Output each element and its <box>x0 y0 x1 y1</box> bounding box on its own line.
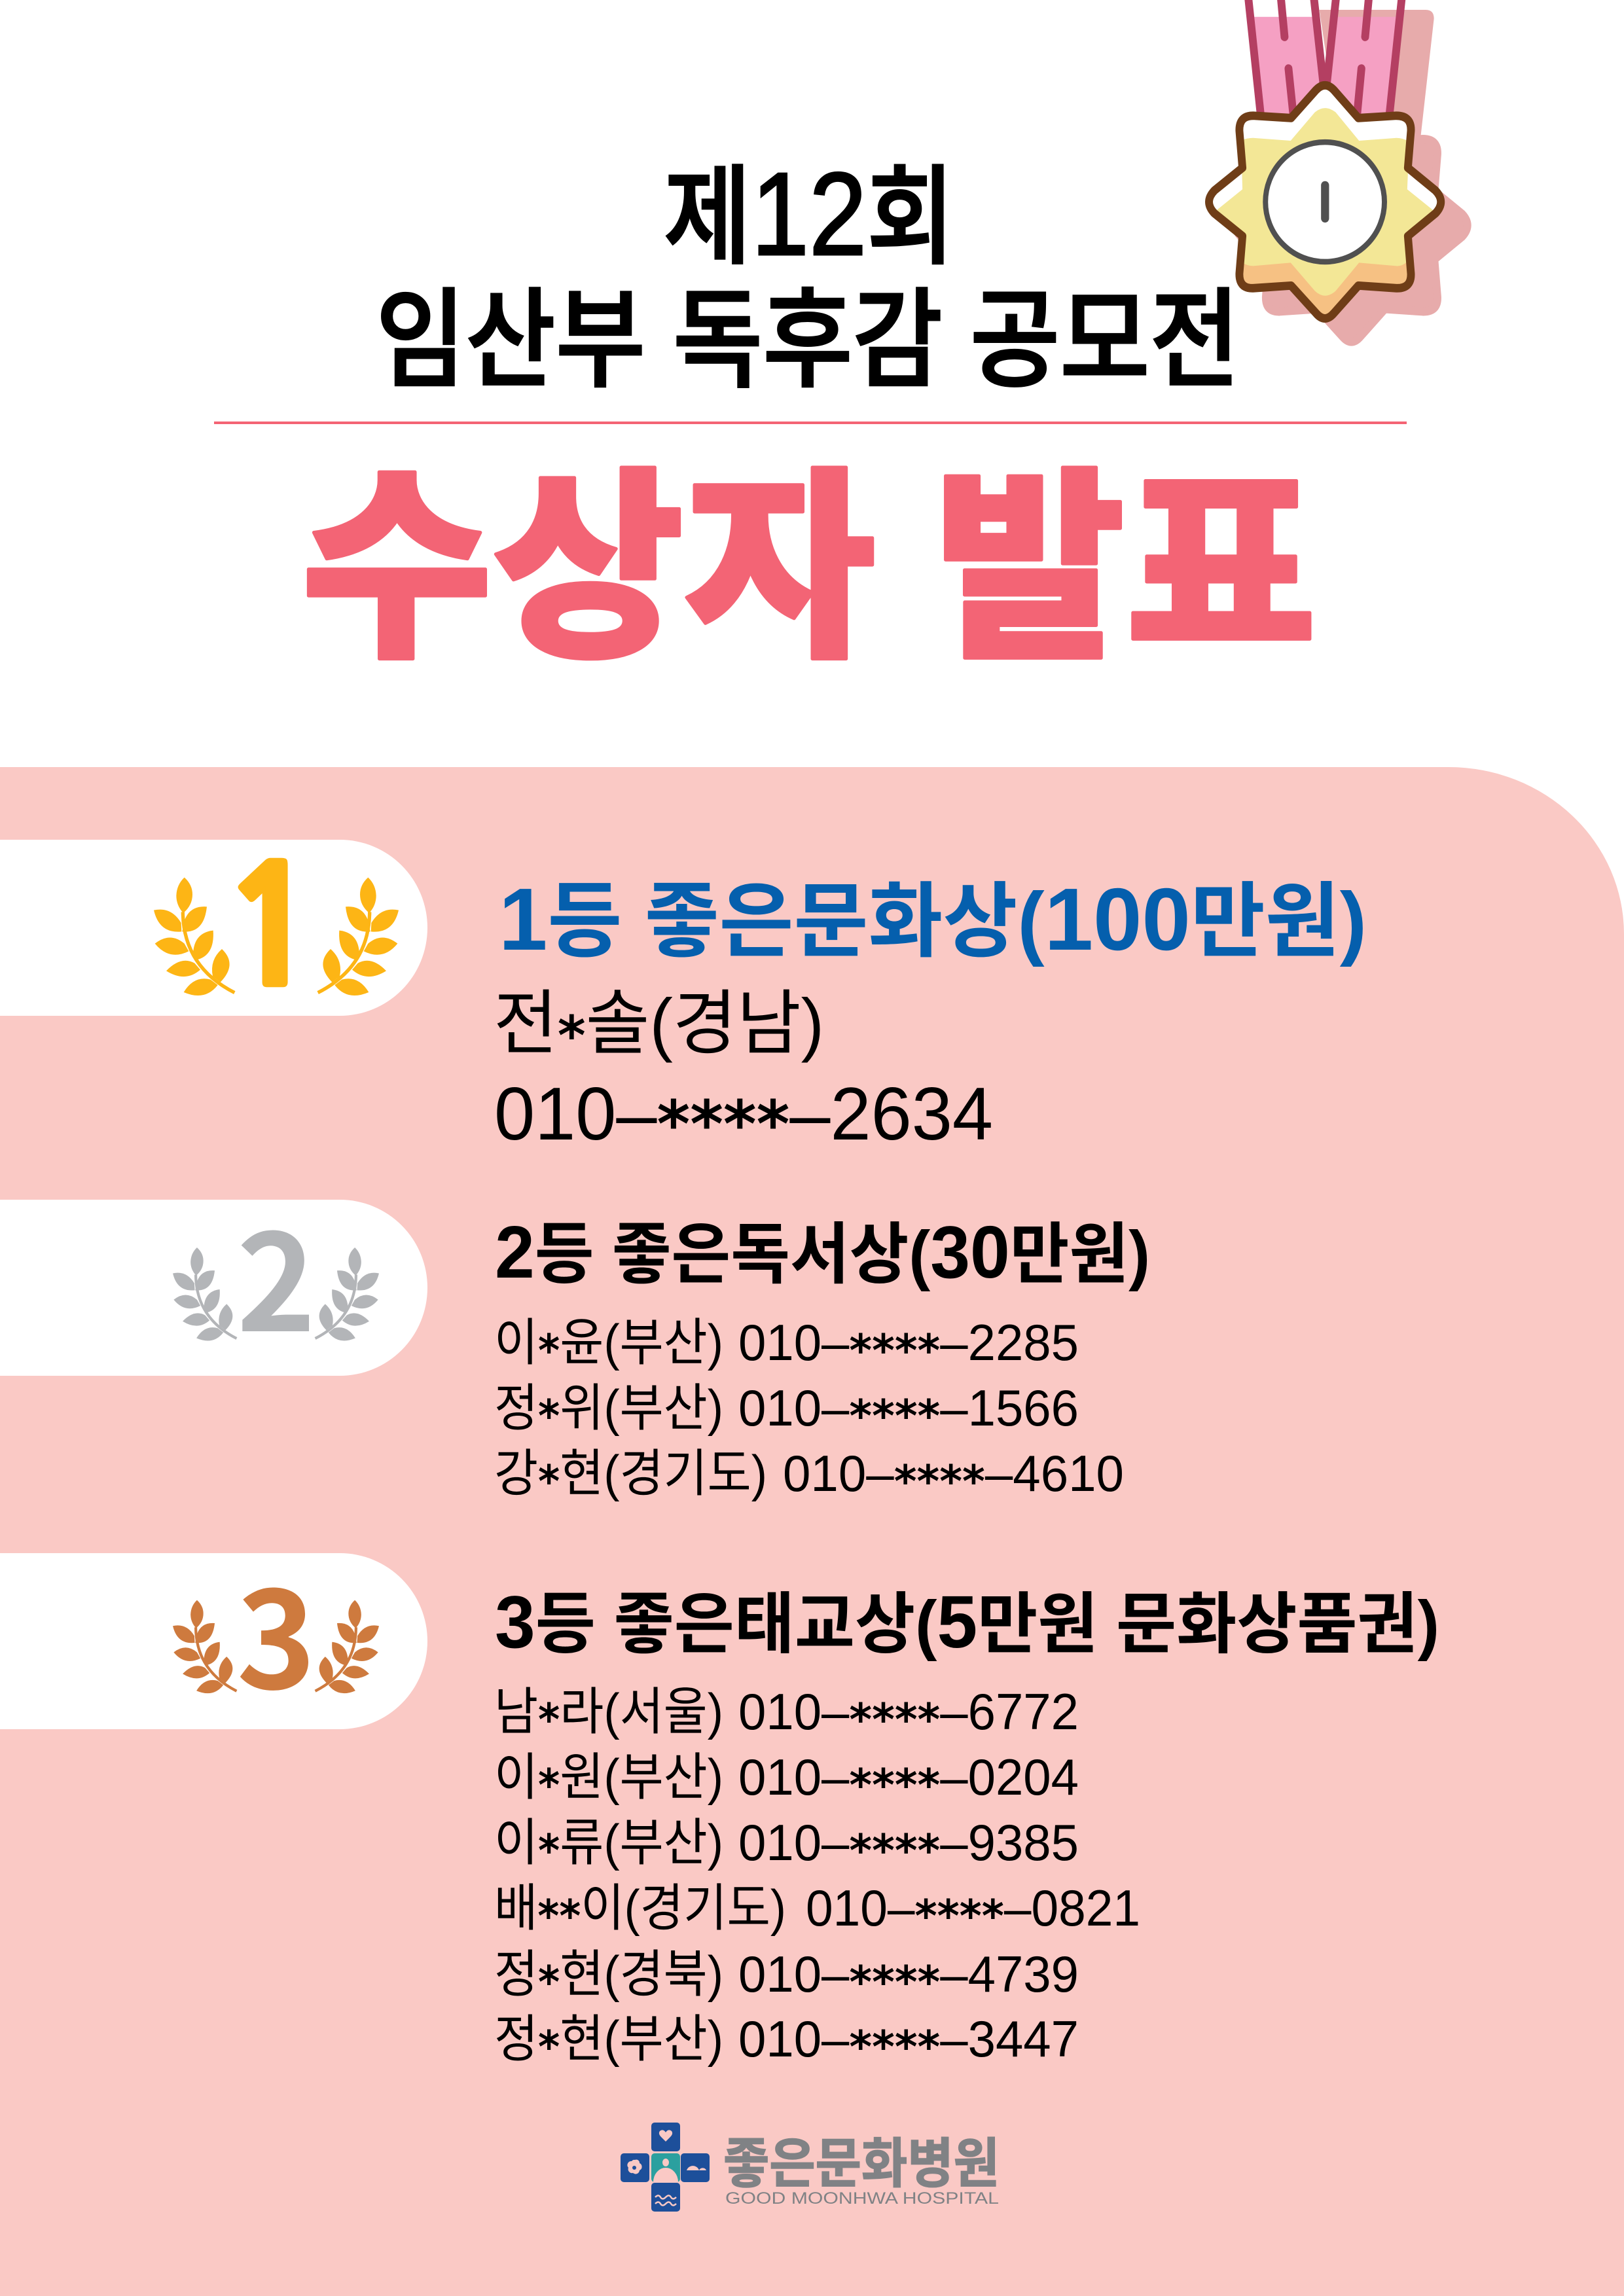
winner row: –6772 <box>940 1683 1079 1740</box>
winner row: 010– <box>738 1945 852 2003</box>
winner row <box>494 1379 1079 1443</box>
laurel left bronze <box>173 1600 236 1693</box>
winner row: –0204 <box>940 1748 1079 1806</box>
medal star <box>1204 85 1447 330</box>
winner row: 정 <box>494 1945 541 2003</box>
logo mark: four-part cross <box>621 2123 710 2212</box>
winner row: **** <box>849 2022 940 2073</box>
badge: third place <box>0 1534 427 1729</box>
text block: first prize: * <box>558 1004 586 1067</box>
winner row: 이 <box>494 1314 541 1371</box>
badge: first place <box>0 840 427 1016</box>
winner row <box>494 1748 1079 1812</box>
winner row: –2285 <box>940 1314 1079 1371</box>
winner row: **** <box>849 1391 940 1443</box>
winner row: **** <box>849 1957 940 2009</box>
winner row: 정 <box>494 2010 541 2068</box>
winner row <box>494 2010 1079 2073</box>
winner row: 남 <box>494 1683 541 1740</box>
text block: second prize: 2등 좋은독서상(30만원) <box>495 1211 1150 1293</box>
text block: second prize <box>494 1211 1150 1508</box>
logo name Korean: 좋은문화병원 <box>723 2120 1000 2198</box>
winner row: 라(서울) <box>560 1683 723 1740</box>
text block: first prize: –2634 <box>789 1073 993 1156</box>
winner row <box>494 1879 1140 1943</box>
medal center disc <box>1265 142 1384 262</box>
winner row: ** <box>537 1891 581 1943</box>
panel: pink award background <box>0 767 1624 2296</box>
winner row: 010– <box>738 1814 852 1871</box>
winner row: **** <box>849 1325 940 1377</box>
winner row: **** <box>914 1891 1004 1943</box>
winner row <box>494 1444 1124 1508</box>
text block: first prize <box>494 870 1367 1162</box>
text block: first prize: 1등 좋은문화상(100만원) <box>499 870 1367 969</box>
laurel left gold <box>154 878 234 996</box>
winner row: 류(부산) <box>560 1814 723 1871</box>
logo: Good Moonhwa Hospital <box>621 2120 1000 2212</box>
winner row: 위(부산) <box>560 1379 723 1437</box>
rank number 1: 1 <box>223 846 321 1009</box>
laurel right bronze <box>316 1600 379 1693</box>
winner row: 현(경북) <box>560 1945 723 2003</box>
winner row: 강 <box>494 1444 541 1502</box>
laurel left silver <box>173 1247 236 1340</box>
laurel right silver <box>316 1247 379 1340</box>
text block: first prize: 솔(경남) <box>586 984 824 1063</box>
text block: first prize: 전 <box>494 984 558 1063</box>
winner row: * <box>538 1825 560 1877</box>
winner row: 010– <box>806 1879 920 1937</box>
winner row: 010– <box>738 1314 852 1371</box>
winner row: 윤(부산) <box>560 1314 723 1371</box>
icon: gold medal with ribbon <box>1204 0 1468 342</box>
winner row: * <box>538 1695 560 1746</box>
rank number 2: 2 <box>237 1176 316 1371</box>
rank number 3: 3 <box>237 1534 316 1728</box>
winner row: 이 <box>494 1748 541 1806</box>
winner row <box>494 1683 1079 1746</box>
medal shadow <box>1235 10 1468 342</box>
winner row: –1566 <box>940 1379 1079 1437</box>
winner row: **** <box>849 1825 940 1877</box>
winner row <box>494 1945 1079 2009</box>
text block: third prize <box>494 1581 1439 2073</box>
winner row: 이(경기도) <box>581 1879 786 1937</box>
winner row <box>494 1814 1079 1877</box>
winner row: 정 <box>494 1379 541 1437</box>
text block: third prize: 3등 좋은태교상(5만원 문화상품권) <box>495 1581 1439 1663</box>
badge: second place <box>0 1176 427 1376</box>
winner row: * <box>538 2022 560 2073</box>
winner row: 현(경기도) <box>560 1444 767 1502</box>
winner row: –4610 <box>985 1444 1124 1502</box>
winner row: **** <box>849 1695 940 1746</box>
winner row: **** <box>849 1760 940 1812</box>
winner row: 현(부산) <box>560 2010 723 2068</box>
winner row: **** <box>894 1456 985 1508</box>
title: contest name <box>376 149 1240 409</box>
winner row: * <box>538 1760 560 1812</box>
winner row: 010– <box>738 1379 852 1437</box>
winner row: 010– <box>738 2010 852 2068</box>
logo name English: GOOD MOONHWA HOSPITAL <box>725 2189 999 2208</box>
winner row: * <box>538 1325 560 1377</box>
text block: first prize: **** <box>657 1087 789 1162</box>
title: contest name: 제12회 <box>664 149 954 280</box>
divider <box>214 422 1407 424</box>
text block: first prize: 010– <box>494 1073 660 1156</box>
title: contest name: 임산부 독후감 공모전 <box>376 253 1240 409</box>
winner row: –0821 <box>1004 1879 1140 1937</box>
heading: winners announcement: 수상자 발표 <box>301 403 1317 698</box>
winner row: * <box>538 1391 560 1443</box>
medal ribbon <box>1248 0 1402 117</box>
laurel right gold <box>318 878 399 996</box>
winner row <box>494 1314 1079 1377</box>
winner row: –3447 <box>940 2010 1079 2068</box>
winner row: –4739 <box>940 1945 1079 2003</box>
winner row: * <box>538 1456 560 1508</box>
winner row: 원(부산) <box>560 1748 723 1806</box>
winner row: 이 <box>494 1814 541 1871</box>
winner row: 010– <box>738 1748 852 1806</box>
winner row: 010– <box>783 1444 897 1502</box>
winner row: 010– <box>738 1683 852 1740</box>
winner row: –9385 <box>940 1814 1079 1871</box>
winner row: * <box>538 1957 560 2009</box>
winner row: 배 <box>494 1879 541 1937</box>
